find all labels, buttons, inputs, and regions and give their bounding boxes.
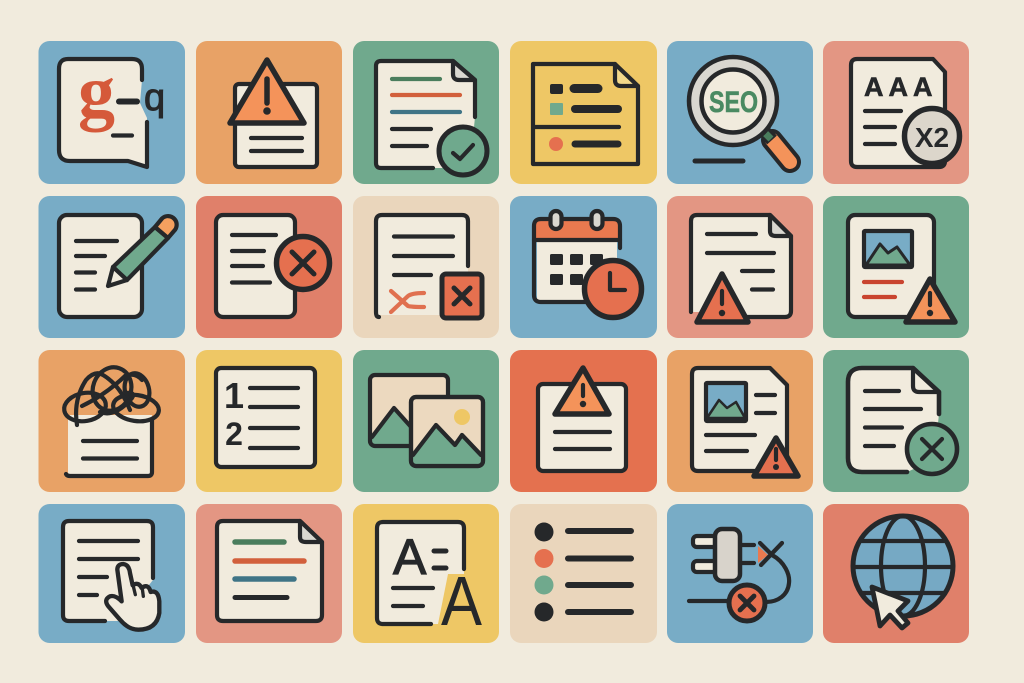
icon: speech bubble with g and q — [59, 51, 165, 167]
icon: page with coloured lines — [217, 521, 322, 621]
panel: coloured text document — [196, 504, 342, 643]
panel: click document — [38, 504, 185, 643]
icon: coloured bullets list — [534, 522, 631, 622]
panel: rejected document — [196, 196, 342, 338]
icon: speech bubble with g and q: q — [144, 77, 165, 119]
panel: numbered list — [196, 350, 342, 492]
panel: document warning — [667, 196, 813, 338]
icon: document with check — [376, 61, 487, 175]
icon: document with two letter A — [377, 522, 482, 640]
panel: removed page — [823, 350, 969, 492]
icon: magnifying glass with SEO — [689, 57, 790, 162]
icon: numbered list document: 1 — [224, 375, 244, 416]
panel: font size document — [353, 504, 499, 643]
icon: yellow form — [533, 64, 638, 164]
icon: AAA document with x2 — [851, 59, 960, 167]
panel: bullet list — [510, 504, 657, 643]
panel: warning at top of page — [510, 350, 657, 492]
panel: keyword speech document — [38, 41, 185, 184]
panel: edit document — [38, 196, 185, 338]
panel: warning over document — [196, 41, 342, 184]
icon: page with warning tab — [538, 368, 626, 471]
panel: approved document — [353, 41, 499, 184]
icon: document with pencil — [59, 215, 177, 317]
icon: speech bubble with g and q: g — [78, 51, 115, 133]
icon: globe with cursor — [853, 516, 953, 628]
panel: checklist document — [510, 41, 657, 184]
panel: broken plugin — [667, 504, 813, 643]
icon: folded page with warning — [691, 215, 791, 322]
icon: AAA document with x2: AAA — [864, 72, 938, 102]
panel: duplicate text document — [823, 41, 969, 184]
icon: document with pointing hand — [63, 521, 159, 630]
panel: duplicate images — [353, 350, 499, 492]
icon: document with picture and warning — [848, 215, 955, 322]
icon: unplugged connector — [689, 529, 789, 621]
icon: calendar with clock — [534, 211, 642, 318]
icon: warning document — [230, 60, 317, 167]
icon: document with two letter A: A — [441, 562, 482, 640]
icon: page with x circle — [848, 368, 957, 474]
icon: document with x circle — [216, 215, 330, 317]
panel: schedule — [510, 196, 657, 338]
icon: two landscape pictures — [370, 375, 483, 466]
icon: magnifying glass with SEO: SEO — [709, 86, 758, 119]
panel: crossed lines document — [353, 196, 499, 338]
icon: numbered list document — [216, 368, 315, 467]
icon: numbered list document: 2 — [225, 416, 243, 452]
icon: document with two letter A: A — [393, 529, 427, 585]
panel: image document warning — [823, 196, 969, 338]
icon: AAA document with x2: X2 — [915, 122, 949, 153]
icon: article with picture and warning — [692, 368, 798, 476]
panel: SEO magnifier — [667, 41, 813, 184]
panel: web link — [823, 504, 969, 643]
icon: document with red x box — [376, 215, 482, 318]
icon: scribble over document — [62, 362, 161, 476]
panel: tangled content — [38, 350, 185, 492]
panel: article warning — [667, 350, 813, 492]
